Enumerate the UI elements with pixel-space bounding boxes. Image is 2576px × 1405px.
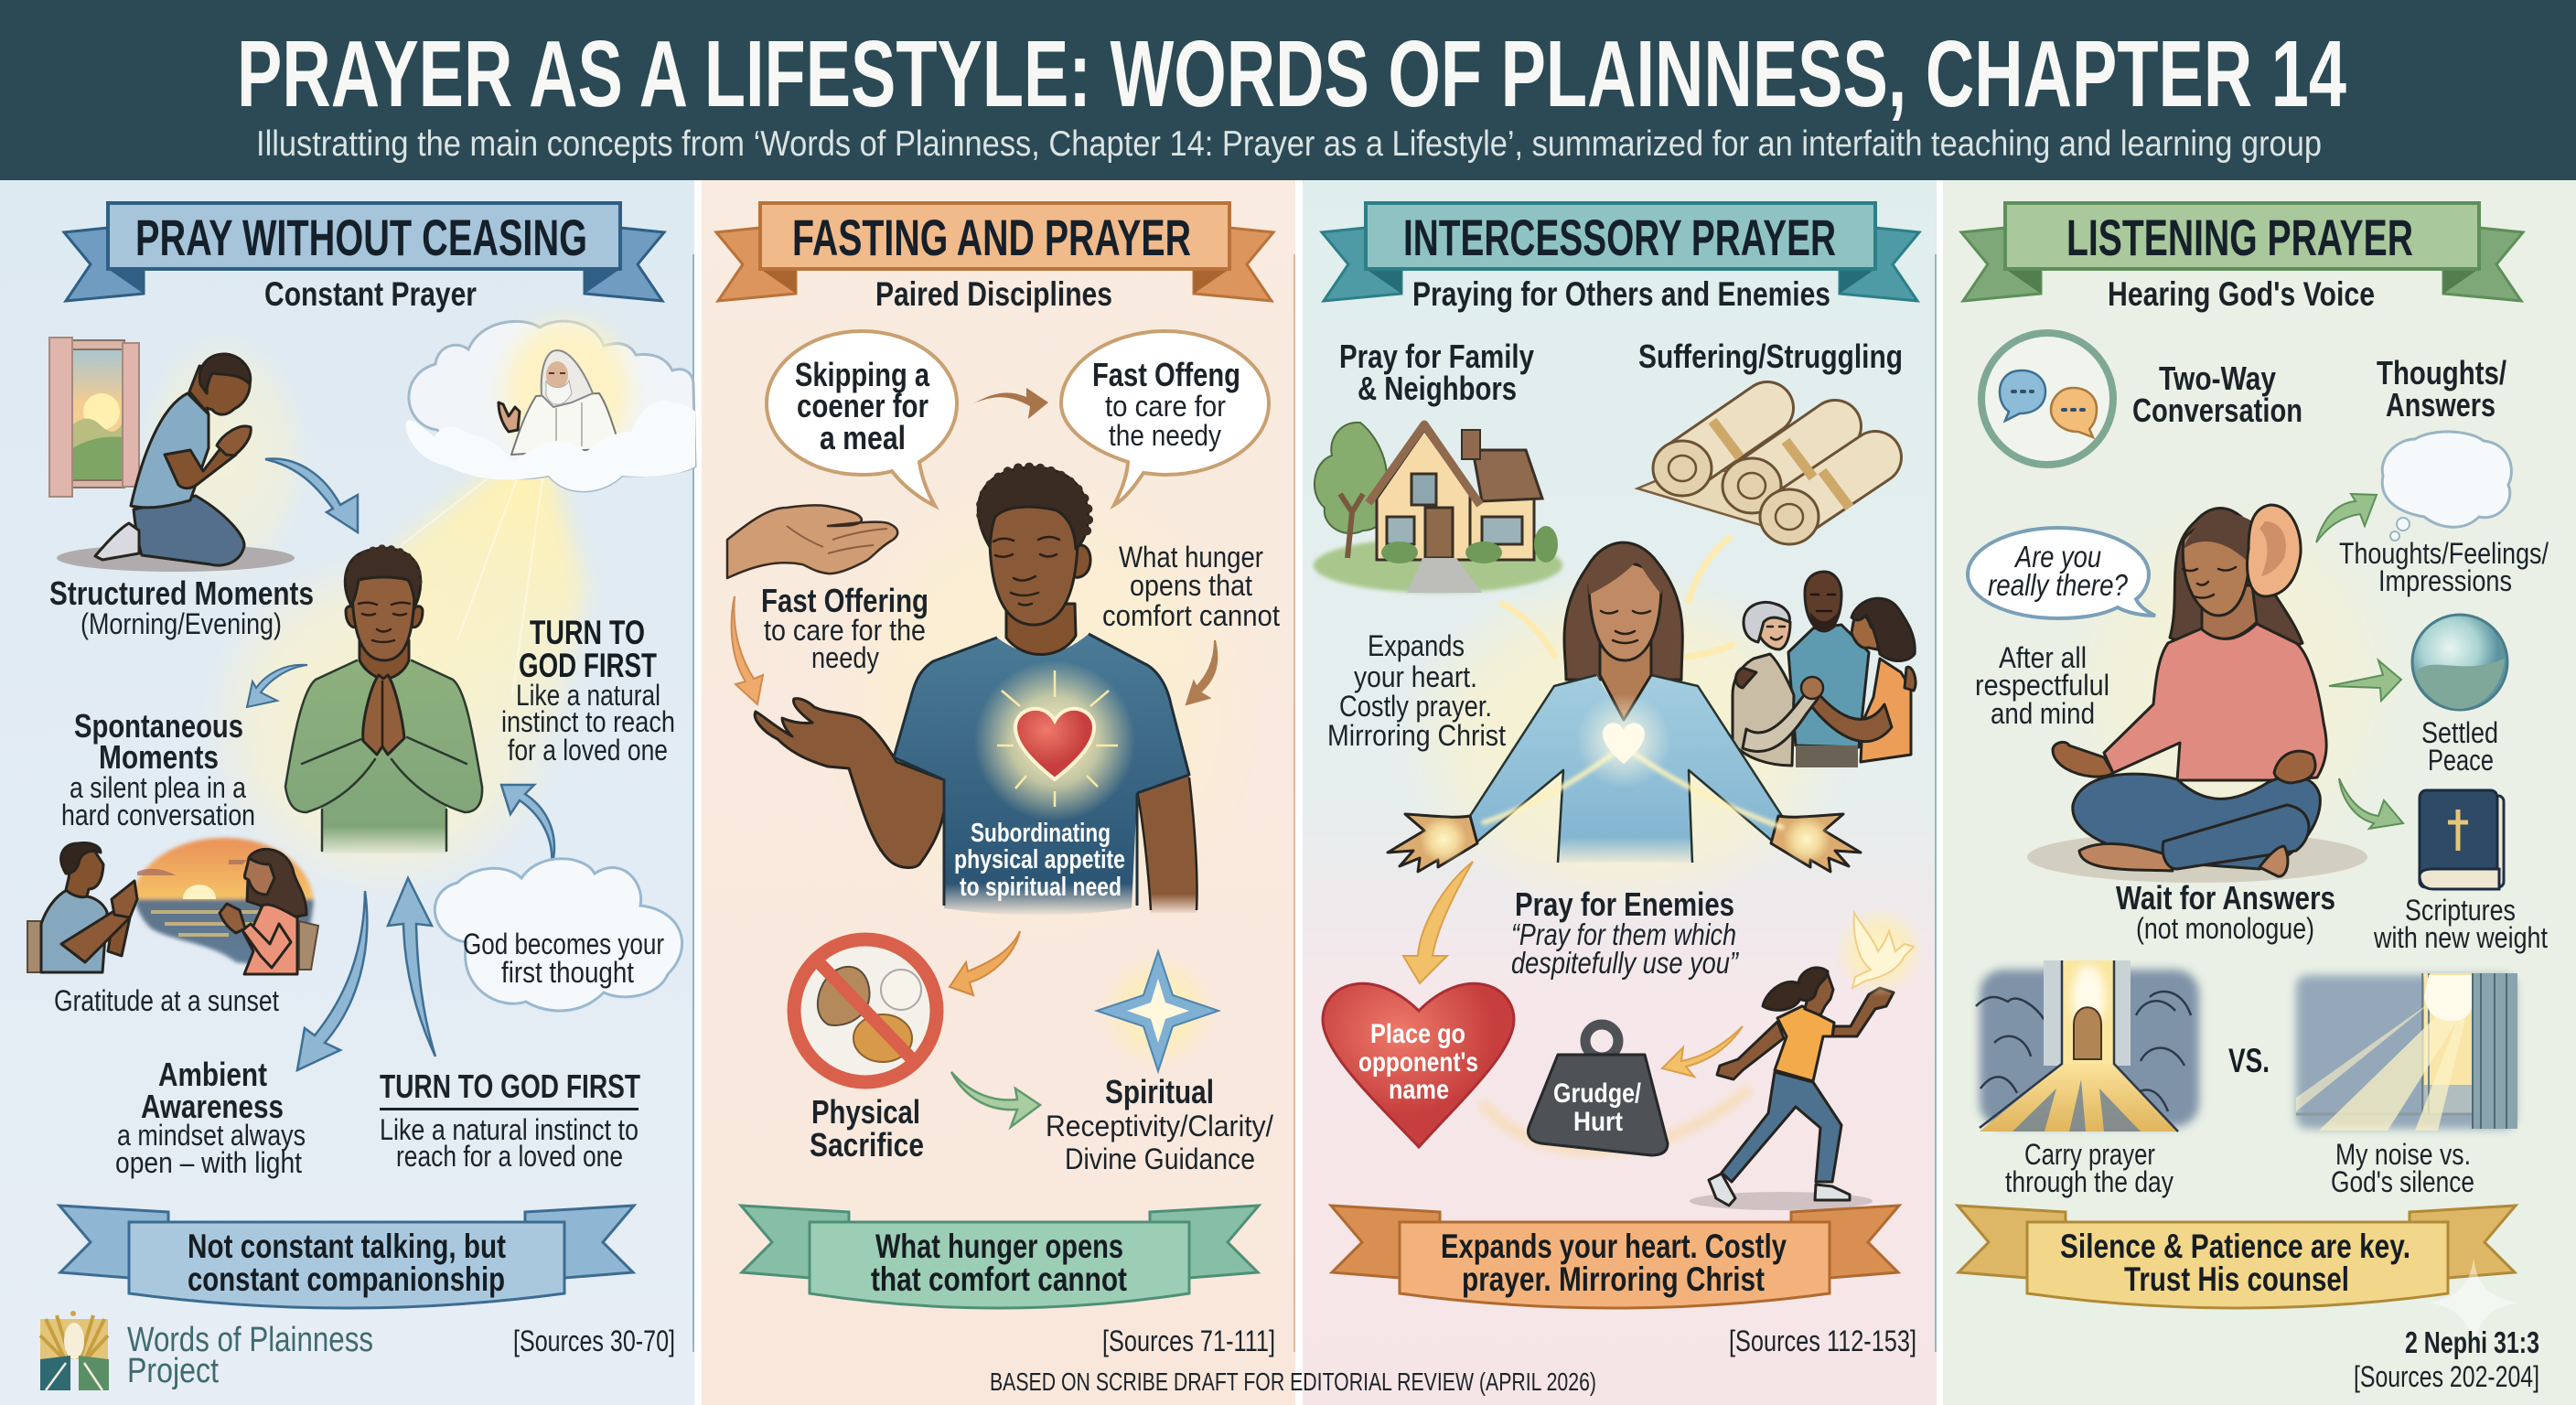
icon: thought cloud <box>2382 432 2511 541</box>
text: pray for family <box>1339 338 1534 407</box>
figure: meditating woman with large ear <box>2027 505 2367 883</box>
text: two-way conversation: Two-Way <box>2159 359 2276 397</box>
panel: pray without ceasing <box>0 180 695 1405</box>
icon: offering hand <box>727 505 897 578</box>
icon: scripture book <box>2420 790 2504 889</box>
text: two-way conversation <box>2132 359 2302 429</box>
text: structured moments <box>49 574 314 640</box>
text: after all respectful: After all <box>1999 641 2087 674</box>
text: expands your heart: Costly prayer. <box>1339 690 1492 723</box>
caption: gratitude at a sunset: Gratitude at a sunset <box>54 984 279 1017</box>
sources: [Sources 112-153] <box>1729 1325 1916 1357</box>
sources: [Sources 71-111] <box>1102 1325 1275 1357</box>
text: what hunger opens: What hunger <box>1119 541 1263 574</box>
icon: heart with opponent's name: opponent's <box>1358 1047 1478 1078</box>
text: physical sacrifice <box>810 1093 924 1164</box>
text: thoughts answers <box>2377 354 2506 424</box>
text: fast offering: to care for the <box>764 614 926 647</box>
takeaway banner: companionship: constant companionship <box>188 1260 505 1298</box>
icon: heart with opponent's name: name <box>1389 1075 1449 1105</box>
text: spiritual: Divine Guidance <box>1065 1142 1255 1175</box>
captions: God's silence <box>2331 1165 2474 1198</box>
figure: fasting man with glowing heart: to spiritual need <box>960 873 1122 902</box>
takeaway banner: companionship <box>59 1206 634 1308</box>
text: pray for enemies <box>1511 885 1740 980</box>
text: turn to God first side note: TURN TO <box>530 614 645 651</box>
callout: God becomes your first thought: God becomes your <box>463 928 664 960</box>
text: wait for answers: Wait for Answers <box>2116 879 2335 917</box>
text: pray for enemies: “Pray for them which <box>1511 917 1736 951</box>
speech bubble: fast offering: to care for <box>1105 390 1226 423</box>
text: pray for family: & Neighbors <box>1358 370 1517 407</box>
text: pray for enemies: Pray for Enemies <box>1515 885 1734 923</box>
takeaway banner: silence and patience: Silence & Patience are key. <box>2060 1228 2410 1265</box>
icon: dove <box>1834 906 1926 997</box>
arrow: release weight <box>1662 1026 1743 1077</box>
logo: Words of Plainness Project <box>40 1311 373 1390</box>
takeaway banner: hunger <box>741 1206 1259 1308</box>
arrow: to peace <box>2329 660 2401 701</box>
text: physical sacrifice: Sacrifice <box>810 1126 924 1164</box>
text: wait for answers <box>2116 879 2335 945</box>
text: structured moments: Structured Moments <box>49 574 314 612</box>
speech bubble: skipping a meal: a meal <box>820 419 906 456</box>
text: wait for answers: (not monologue) <box>2136 912 2314 945</box>
text: ambient awareness: Ambient <box>158 1056 267 1093</box>
takeaway banner: expands your heart <box>1331 1206 1899 1308</box>
speech bubble: are you really there: really there? <box>1988 568 2129 602</box>
text: expands your heart: Mirroring Christ <box>1327 719 1506 752</box>
citation <box>2354 1325 2539 1393</box>
heading banner: fasting and prayer: FASTING AND PRAYER <box>792 209 1191 266</box>
subheading: Paired Disciplines <box>875 275 1112 313</box>
illustration: crowd and lit doorway <box>1976 960 2199 1132</box>
heading banner: intercessory prayer <box>1322 203 1919 301</box>
text: thoughts feelings impressions <box>2339 537 2549 597</box>
text: settled peace: Settled <box>2421 716 2498 749</box>
speech bubble: fast offering <box>1061 331 1269 505</box>
speech bubble: fast offering: Fast Offeng <box>1092 356 1240 393</box>
text: turn to God first side note: GOD FIRST <box>519 647 657 684</box>
captions: My noise vs. <box>2335 1138 2471 1171</box>
icon: settled peace orb <box>2412 615 2507 710</box>
panel: fasting and prayer <box>702 180 1295 1405</box>
watermark star <box>2430 1258 2517 1349</box>
text: spontaneous moments <box>61 707 255 831</box>
text: settled peace <box>2421 716 2498 777</box>
text: scriptures <box>2373 894 2548 954</box>
subtitle: Illustratting the main concepts from ‘Words of Plainness, Chapter 14: Prayer as a Lifestyle’, summarized for an interfaith teaching and learning group <box>256 124 2322 164</box>
takeaway banner: silence and patience <box>1958 1206 2516 1308</box>
text: what hunger opens: comfort cannot <box>1102 599 1280 632</box>
text: after all respectful: and mind <box>1991 697 2095 730</box>
text: pray for enemies: despitefully use you” <box>1511 946 1740 980</box>
speech bubble: skipping a meal <box>767 331 957 506</box>
decorative rays of prayer <box>1502 538 1733 657</box>
text: fast offering: needy <box>811 641 879 674</box>
arrow: left orange <box>732 596 763 704</box>
figure: fasting man with glowing heart <box>755 467 1197 915</box>
figure: woman with open arms <box>1388 542 1861 872</box>
callout: God becomes your first thought: first thought <box>501 956 634 989</box>
speech bubble: skipping a meal: coener for <box>797 387 928 424</box>
icon: two-way conversation ring <box>1981 333 2113 465</box>
figure: fasting man with glowing heart: Subordinating <box>971 819 1111 848</box>
icon: no food plate <box>794 939 937 1082</box>
subheading: Hearing God's Voice <box>2108 275 2375 313</box>
icon: heart with opponent's name: Place go <box>1370 1019 1465 1049</box>
figure: running woman <box>1690 968 1894 1210</box>
text: turn to God first <box>380 1067 640 1173</box>
text: spiritual <box>1046 1073 1273 1175</box>
text: thoughts feelings impressions: Impressions <box>2378 564 2512 597</box>
text: turn to God first side note: Like a natural <box>516 679 660 712</box>
panel: listening prayer <box>1943 180 2576 1405</box>
text: spontaneous moments: Spontaneous <box>74 707 243 745</box>
subheading: Praying for Others and Enemies <box>1412 275 1830 313</box>
text: expands your heart <box>1327 629 1506 752</box>
heading banner: fasting and prayer <box>716 203 1273 301</box>
icon: window at sunrise <box>49 338 139 497</box>
text: spiritual: Receptivity/Clarity/ <box>1046 1110 1273 1142</box>
text: fast offering <box>761 582 928 674</box>
text: fast offering: Fast Offering <box>761 582 928 619</box>
heading banner: pray without ceasing: PRAY WITHOUT CEASING <box>135 209 587 266</box>
icon: grudge weight: Hurt <box>1573 1107 1623 1137</box>
speech bubble: skipping a meal: Skipping a <box>795 356 930 393</box>
text: spiritual: Spiritual <box>1105 1073 1214 1110</box>
icon: spiritual star <box>1097 951 1218 1071</box>
arrow: kneeling man to center <box>265 459 358 532</box>
arrow: to thoughts <box>2316 494 2377 542</box>
text: after all respectful <box>1975 641 2109 730</box>
text: expands your heart: Expands <box>1368 629 1465 662</box>
heading banner: pray without ceasing <box>64 203 664 301</box>
text: ambient awareness: a mindset always <box>117 1119 306 1152</box>
takeaway banner: hunger: What hunger opens <box>875 1228 1123 1265</box>
text: thoughts answers: Answers <box>2386 386 2496 424</box>
text: ambient awareness <box>115 1056 306 1179</box>
text: turn to God first: TURN TO GOD FIRST <box>380 1067 640 1105</box>
icon: family group <box>1733 572 1916 767</box>
figure: fasting man with glowing heart: physical appetite <box>954 845 1125 874</box>
subheading: Constant Prayer <box>264 275 477 313</box>
text: spontaneous moments: hard conversation <box>61 799 255 831</box>
text: what hunger opens: opens that <box>1130 569 1252 602</box>
text: what hunger opens <box>1102 541 1280 632</box>
text: structured moments: (Morning/Evening) <box>80 607 282 640</box>
text: turn to God first side note: for a loved one <box>508 734 668 767</box>
illustration: gratitude at a sunset <box>27 838 318 974</box>
takeaway banner: expands your heart: prayer. Mirroring Christ <box>1462 1260 1765 1298</box>
text: pray for family: Pray for Family <box>1339 338 1534 375</box>
label: versus: VS. <box>2228 1042 2270 1079</box>
takeaway banner: expands your heart: Expands your heart. Costly <box>1441 1228 1787 1265</box>
arrow: up to central figure <box>388 878 435 1056</box>
figure: kneeling man praying <box>57 354 295 572</box>
takeaway banner: hunger: that comfort cannot <box>871 1260 1127 1298</box>
text: turn to God first: reach for a loved one <box>396 1140 623 1173</box>
text: ambient awareness: Awareness <box>141 1088 284 1125</box>
arrow: between bubbles <box>973 388 1048 419</box>
footer note: BASED ON SCRIBE DRAFT FOR EDITORIAL REVIEW (APRIL 2026) <box>990 1367 1596 1396</box>
logo: Words of Plainness Project: Project <box>127 1352 219 1390</box>
callout: God becomes your first thought <box>435 859 682 1011</box>
heading banner: listening prayer <box>1961 203 2523 301</box>
captions: through the day <box>2005 1165 2174 1198</box>
text: ambient awareness: open – with light <box>115 1146 302 1179</box>
text: expands your heart: your heart. <box>1354 660 1477 693</box>
arrow: curved up to turn to God first <box>501 785 554 866</box>
arrow: down to ambient awareness <box>297 891 367 1070</box>
captions <box>2005 1138 2474 1198</box>
text: turn to God first: Like a natural instinct to <box>380 1113 639 1146</box>
panel: intercessory prayer <box>1303 180 1937 1405</box>
figure: central praying man <box>285 548 482 853</box>
speech bubble: are you really there: Are you <box>2013 540 2101 574</box>
text: settled peace: Peace <box>2428 744 2494 777</box>
icon: heart with opponent's name <box>1323 983 1514 1147</box>
takeaway banner: silence and patience: Trust His counsel <box>2124 1260 2349 1298</box>
text: two-way conversation: Conversation <box>2132 391 2302 429</box>
logo: Words of Plainness Project: Words of Plainness <box>127 1321 373 1359</box>
arrow: yellow to heart <box>1403 862 1473 983</box>
speech bubble: are you really there <box>1968 528 2155 618</box>
illustration: light through window <box>2296 973 2517 1131</box>
text: turn to God first side note: instinct to reach <box>501 705 675 738</box>
icon: cloud with God figure <box>406 320 695 491</box>
icon: grudge weight: Grudge/ <box>1553 1078 1642 1109</box>
text: spontaneous moments: a silent plea in a <box>70 771 246 804</box>
text: turn to God first side note <box>501 614 675 767</box>
text: spontaneous moments: Moments <box>99 738 219 776</box>
icon: grudge weight <box>1529 1024 1668 1155</box>
takeaway banner: companionship: Not constant talking, but <box>188 1228 506 1265</box>
arrow: orange to plate <box>950 931 1020 995</box>
sources: [Sources 30-70] <box>513 1325 675 1357</box>
text: after all respectful: respectfulul <box>1975 669 2109 702</box>
heading banner: listening prayer: LISTENING PRAYER <box>2066 209 2413 266</box>
arrow: green to spiritual <box>951 1072 1040 1127</box>
captions: Carry prayer <box>2024 1138 2155 1171</box>
arrow: to scriptures <box>2339 778 2403 829</box>
icon: scrolls <box>1637 408 1875 544</box>
header band <box>0 0 2576 180</box>
text: physical sacrifice: Physical <box>811 1093 920 1131</box>
heading banner: intercessory prayer: INTERCESSORY PRAYER <box>1403 209 1836 266</box>
arrow: right brown <box>1186 640 1217 704</box>
speech bubble: fast offering: the needy <box>1109 419 1221 452</box>
text: scriptures: Scriptures <box>2405 894 2516 927</box>
text: scriptures: with new weight <box>2373 921 2548 954</box>
text: suffering: Suffering/Struggling <box>1638 338 1903 375</box>
arrow: spontaneous moments <box>247 665 307 707</box>
icon: house with tree <box>1314 423 1562 593</box>
text: thoughts answers: Thoughts/ <box>2377 354 2506 391</box>
